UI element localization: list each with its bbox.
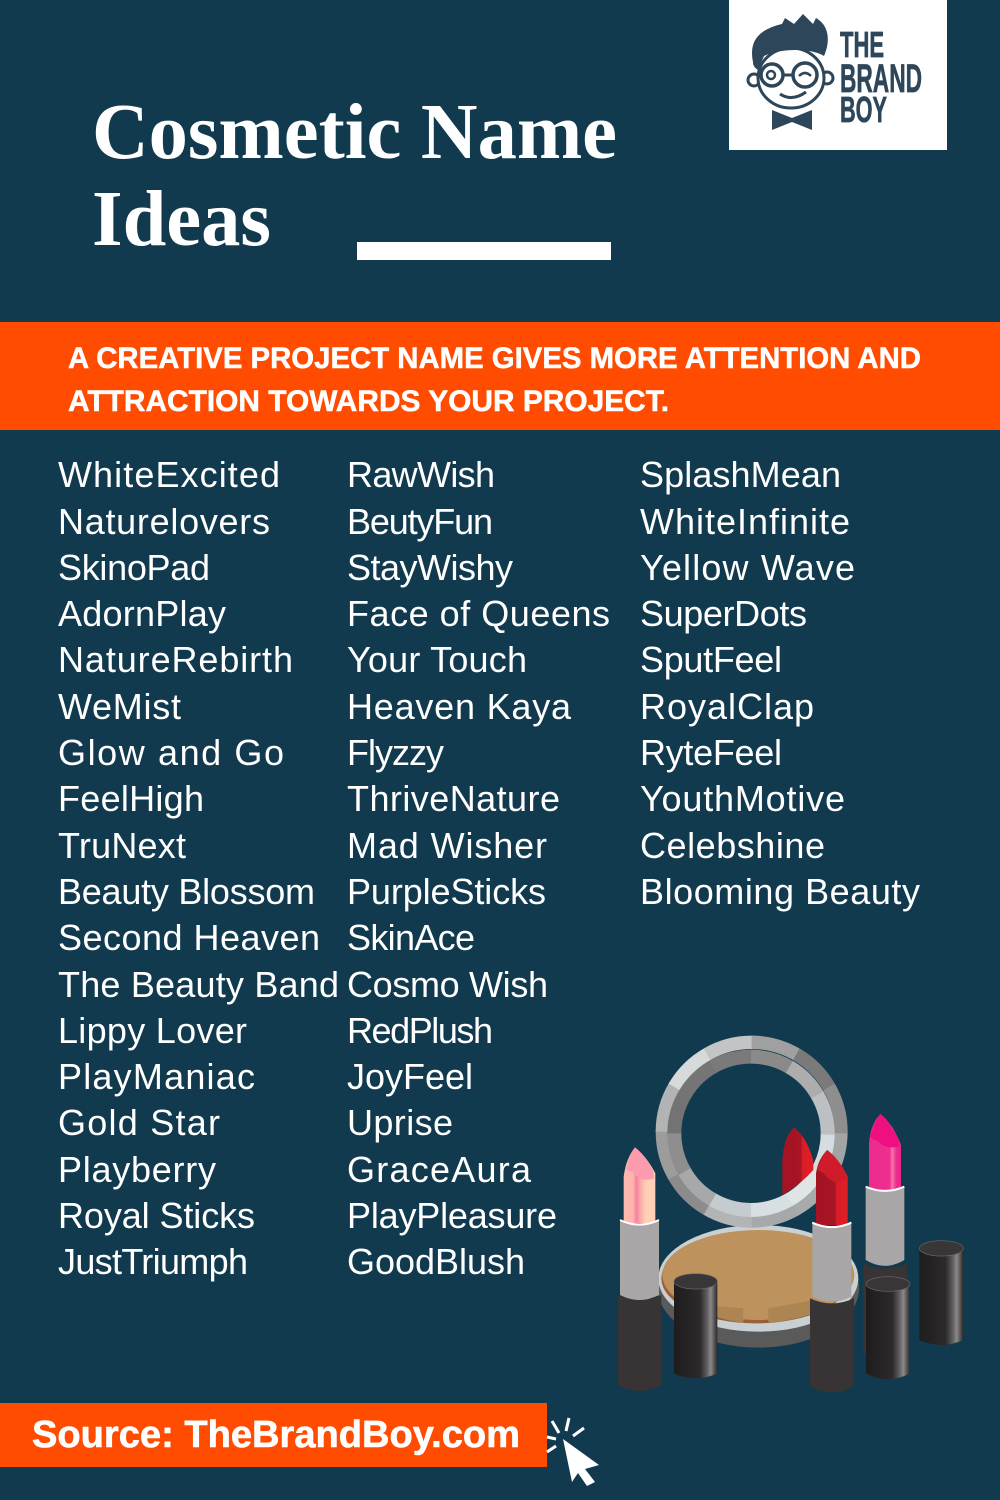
name list: column 2: Mad Wisher [347, 825, 547, 866]
compact base [658, 1225, 859, 1348]
name list: column 3: RyteFeel [640, 732, 782, 773]
name list: column 1: Playberry [58, 1149, 216, 1190]
name list: column 2: Flyzzy [347, 732, 444, 773]
name list: column 2: JoyFeel [347, 1056, 473, 1097]
name list: column 3 [640, 454, 920, 912]
cap: far right [919, 1241, 963, 1345]
name list: column 2: BeutyFun [347, 501, 493, 542]
source bar: Source: TheBrandBoy.com [32, 1414, 520, 1456]
name list: column 2: StayWishy [347, 547, 513, 588]
name list: column 3: WhiteInfinite [640, 501, 850, 542]
name list: column 1 [58, 454, 339, 1282]
name list: column 2: PlayPleasure [347, 1195, 557, 1236]
title underline [357, 242, 611, 260]
mirror ring [662, 1042, 841, 1221]
lipstick: pink [863, 1114, 907, 1358]
name list: column 1: Royal Sticks [58, 1195, 255, 1236]
name list: column 3: YouthMotive [640, 778, 845, 819]
name list: column 2: Face of Queens [347, 593, 610, 634]
name list: column 2: RedPlush [347, 1010, 493, 1051]
logo wordmark [840, 24, 922, 130]
outer bevel segments [662, 1042, 841, 1221]
lipstick: red [810, 1150, 854, 1392]
name list: column 2: ThriveNature [347, 778, 560, 819]
name list: column 1: SkinoPad [58, 547, 210, 588]
name list: column 1: Naturelovers [58, 501, 270, 542]
name list: column 1: Beauty Blossom [58, 871, 315, 912]
illustration: compact mirror and lipsticks [618, 1042, 963, 1392]
name list: column 1: Lippy Lover [58, 1010, 247, 1051]
source bar [0, 1403, 547, 1467]
cap: front left [674, 1274, 717, 1378]
name list: column 1: Second Heaven [58, 917, 320, 958]
name list: column 2: Uprise [347, 1102, 453, 1143]
name list: column 2: PurpleSticks [347, 871, 546, 912]
name list: column 1: Glow and Go [58, 732, 284, 773]
name list: column 3: RoyalClap [640, 686, 814, 727]
logo [729, 0, 947, 150]
banner: A CREATIVE PROJECT NAME GIVES MORE ATTENTION AND [68, 342, 921, 375]
name list: column 1: TruNext [58, 825, 186, 866]
name list: column 2: Your Touch [347, 639, 527, 680]
logo wordmark: BRAND [840, 57, 922, 101]
name list: column 3: SplashMean [640, 454, 841, 495]
name list: column 3: SputFeel [640, 639, 782, 680]
icon: boy with glasses [748, 14, 833, 130]
name list: column 2: GoodBlush [347, 1241, 525, 1282]
name list: column 2: SkinAce [347, 917, 475, 958]
banner: ATTRACTION TOWARDS YOUR PROJECT. [68, 385, 669, 418]
lipstick reflection in mirror [782, 1128, 813, 1195]
name list: column 2: Heaven Kaya [347, 686, 572, 727]
banner [0, 322, 1000, 430]
icon: cursor click [547, 1418, 599, 1486]
title: Ideas [92, 176, 271, 263]
title: Cosmetic Name [92, 89, 617, 176]
name list: column 1: PlayManiac [58, 1056, 255, 1097]
name list: column 1: NatureRebirth [58, 639, 293, 680]
inner bevel segments [674, 1057, 828, 1210]
name list: column 2: Cosmo Wish [347, 964, 548, 1005]
name list: column 2: GraceAura [347, 1149, 532, 1190]
name list: column 3: Blooming Beauty [640, 871, 920, 912]
name list: column 1: Gold Star [58, 1102, 220, 1143]
name list: column 1: WhiteExcited [58, 454, 280, 495]
name list: column 3: Yellow Wave [640, 547, 855, 588]
name list: column 1: FeelHigh [58, 778, 204, 819]
logo wordmark: BOY [840, 89, 887, 130]
name list: column 2 [347, 454, 610, 1282]
name list: column 1: WeMist [58, 686, 181, 727]
lipstick: peach [618, 1147, 661, 1391]
name list: column 3: SuperDots [640, 593, 807, 634]
name list: column 3: Celebshine [640, 825, 825, 866]
name list: column 1: The Beauty Band [58, 964, 339, 1005]
logo wordmark: THE [840, 24, 884, 65]
title [92, 89, 617, 263]
name list: column 1: AdornPlay [58, 593, 226, 634]
name list: column 1: JustTriumph [58, 1241, 248, 1282]
cap: front right [866, 1277, 910, 1379]
name list: column 2: RawWish [347, 454, 495, 495]
